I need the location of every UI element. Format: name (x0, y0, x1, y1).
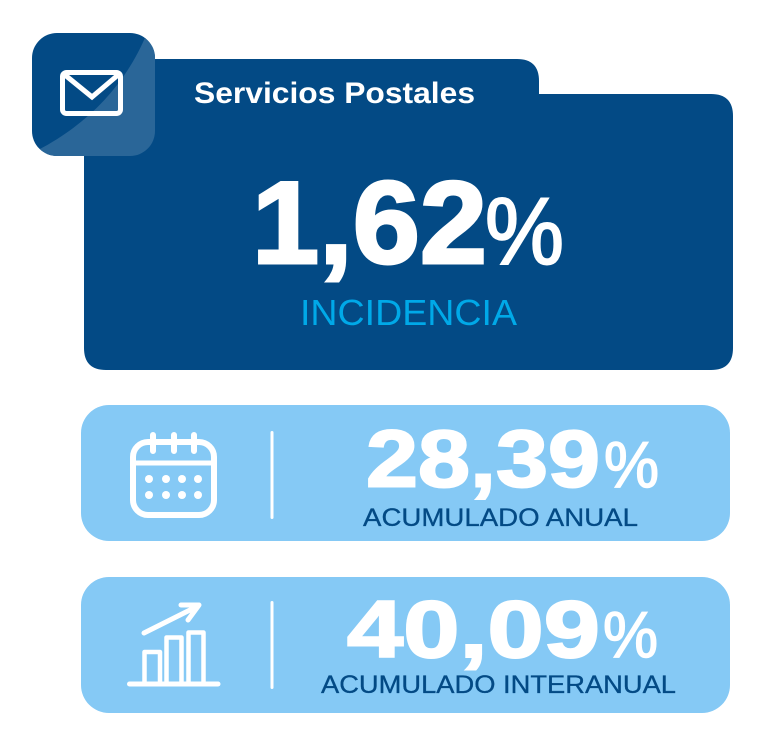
label: ACUMULADO INTERANUAL: ACUMULADO INTERANUAL (321, 671, 676, 699)
value: 40,09%: % (603, 598, 658, 671)
panel: accumulated year over year (81, 577, 730, 713)
heading: Servicios Postales: Servicios Postales (194, 77, 475, 110)
panel: main incidence card (84, 59, 733, 370)
label: ACUMULADO ANUAL: ACUMULADO ANUAL (363, 504, 638, 532)
label: INCIDENCIA: INCIDENCIA (300, 292, 517, 333)
value: 40,09% (347, 585, 658, 675)
big number: 1,62%: 1,62 (252, 157, 487, 288)
icon: rising bar chart (130, 605, 218, 684)
value: 28,39%: % (604, 428, 659, 501)
value: 40,09%: 40,09 (347, 585, 600, 675)
value: 28,39%: 28,39 (366, 414, 600, 504)
icon: calendar (133, 435, 214, 515)
panel: accumulated annual (81, 405, 730, 541)
value: 28,39% (366, 414, 659, 504)
icon: envelope badge (32, 33, 155, 156)
big number: 1,62%: % (485, 179, 564, 285)
